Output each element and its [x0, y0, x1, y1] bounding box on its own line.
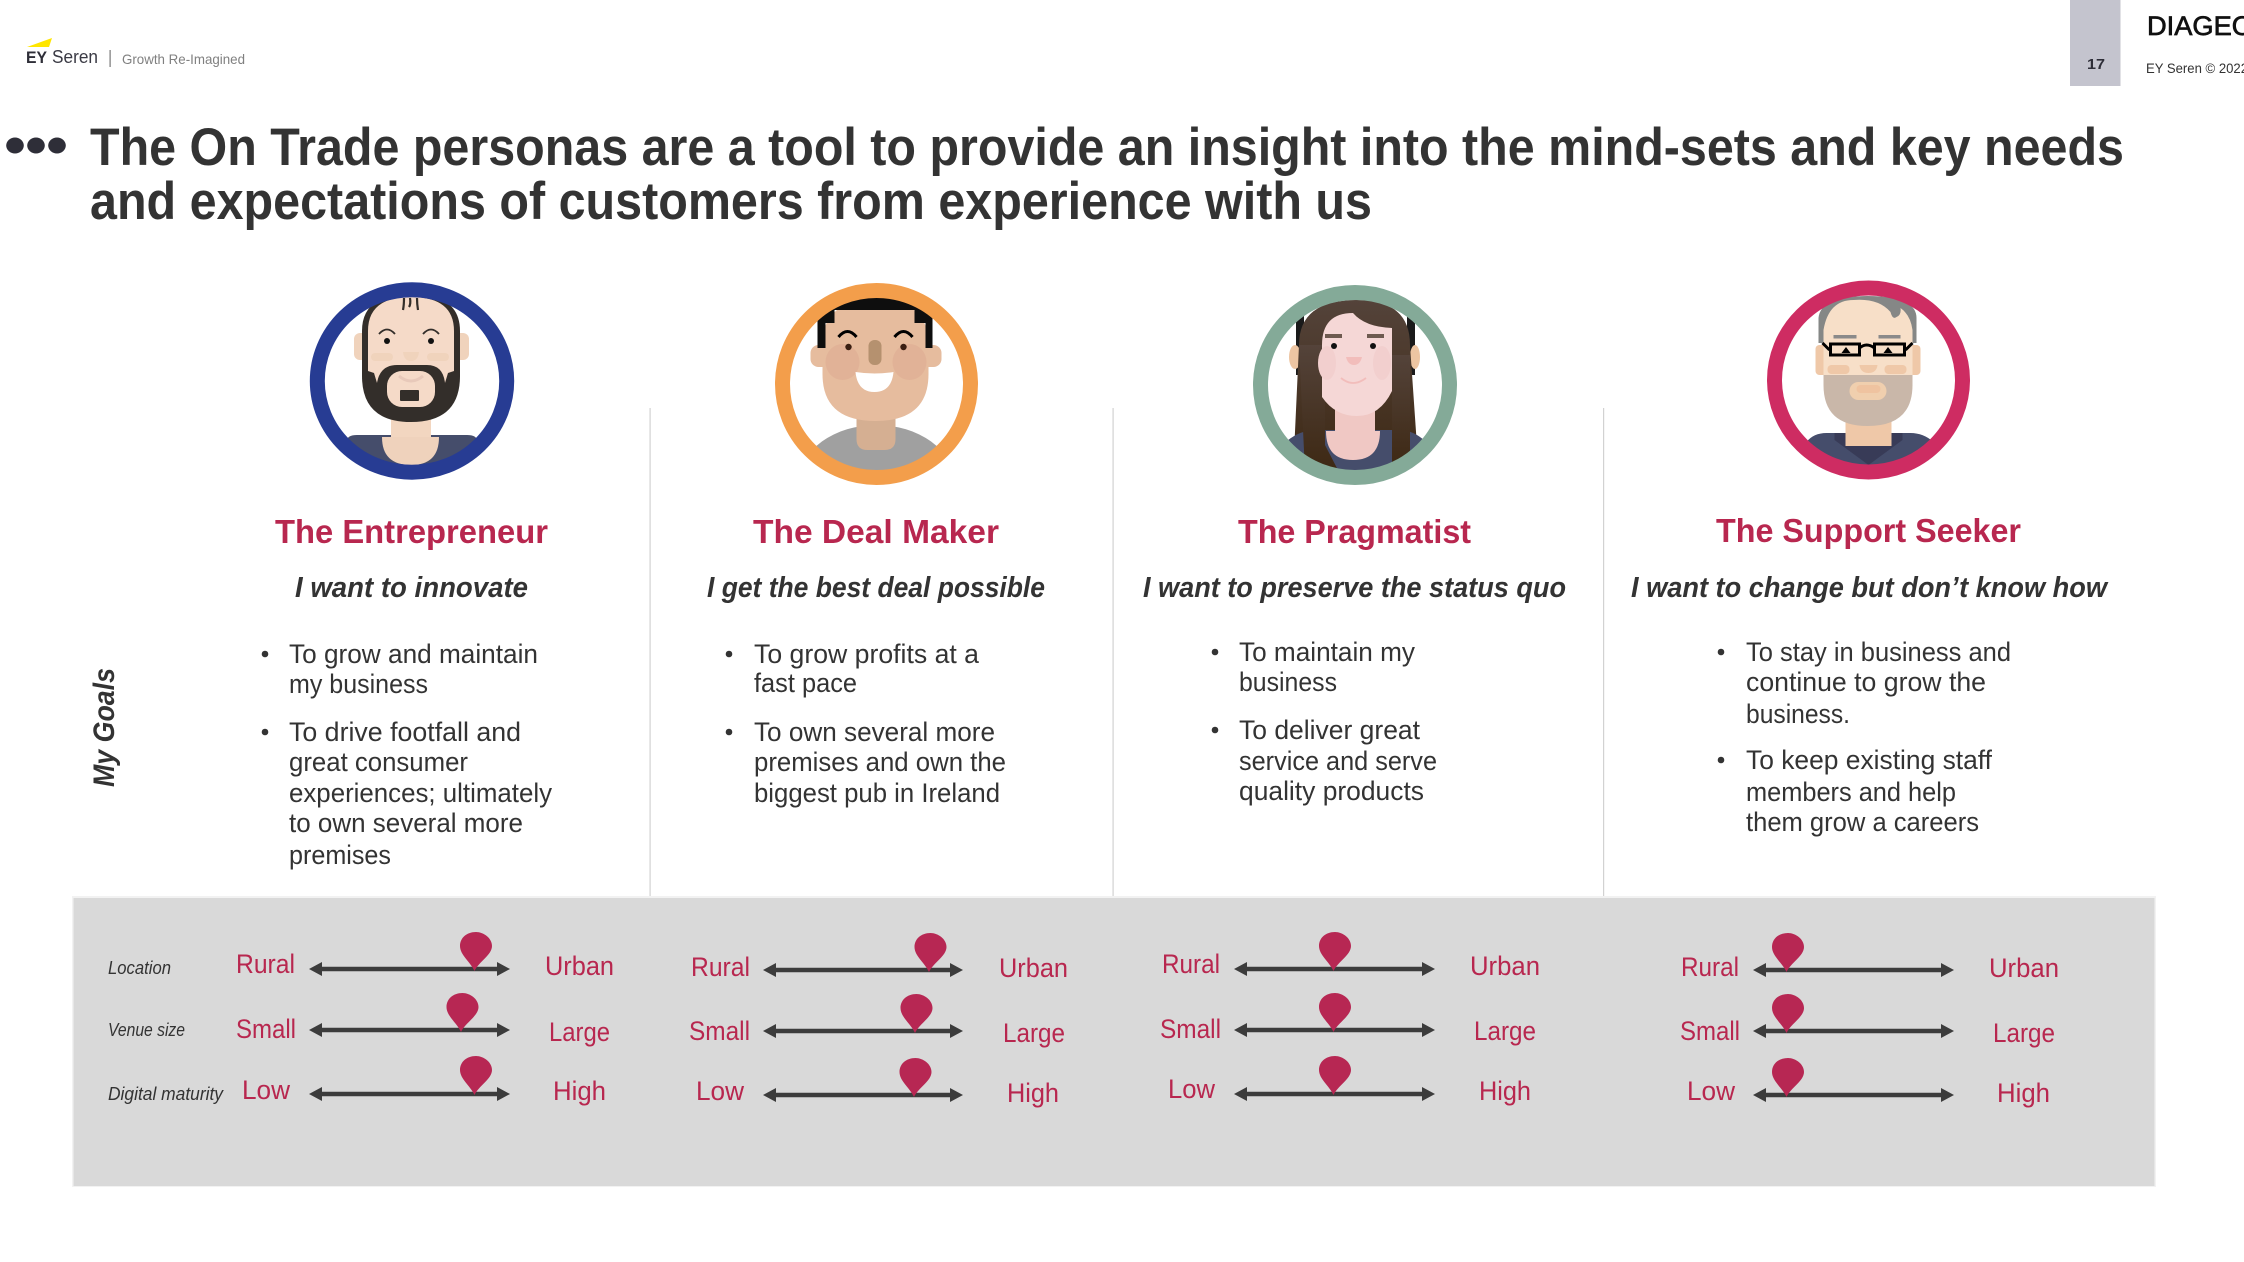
quote: Deal Maker: I get the best deal possible — [707, 572, 1045, 604]
icon: Support Seeker avatar — [1774, 288, 1964, 480]
quote: Pragmatist: I want to preserve the status quo — [1143, 572, 1566, 604]
goals list: Entrepreneur: my business — [289, 669, 428, 699]
icon: Pragmatist avatar — [1260, 292, 1450, 485]
goals list: Deal Maker: To grow profits at a — [754, 639, 979, 669]
scales: Entrepreneur: Rural — [236, 949, 295, 979]
scales: Pragmatist: High — [1479, 1076, 1531, 1106]
scales: Deal Maker — [689, 933, 1068, 1108]
scales: Entrepreneur — [236, 932, 614, 1106]
goals list: Pragmatist: To deliver great — [1239, 715, 1421, 745]
logo: EY Seren Growth Re-Imagined: Seren — [52, 47, 98, 67]
goals list: Support Seeker: continue to grow the — [1746, 667, 1986, 697]
scales: Pragmatist: Large — [1474, 1016, 1536, 1046]
scales: Pragmatist: Low — [1168, 1074, 1215, 1104]
column divider — [1112, 408, 1114, 897]
goals list: Deal Maker — [726, 639, 1006, 808]
goals list: Deal Maker: biggest pub in Ireland — [754, 778, 1000, 808]
scales: Deal Maker: High — [1007, 1078, 1059, 1108]
scales: Entrepreneur: High — [553, 1076, 606, 1106]
goals list: Support Seeker — [1718, 637, 2011, 837]
heading: The Pragmatist: The Pragmatist — [1238, 513, 1471, 550]
scales: Entrepreneur: Small — [236, 1014, 296, 1044]
row labels: Location — [108, 958, 171, 978]
goals list: Entrepreneur — [262, 639, 553, 870]
page number tab: 17 — [2087, 56, 2105, 73]
goals list: Entrepreneur: To drive footfall and — [289, 717, 521, 747]
goals list: Pragmatist — [1212, 637, 1437, 806]
row labels: Digital maturity — [108, 1084, 224, 1104]
icon: Deal Maker avatar — [775, 283, 978, 485]
scales: Entrepreneur: Urban — [545, 951, 614, 981]
scales: Deal Maker: Small — [689, 1016, 750, 1046]
goals list: Pragmatist: business — [1239, 667, 1337, 697]
goals list: Deal Maker: fast pace — [754, 668, 857, 698]
quote: Entrepreneur: I want to innovate — [295, 572, 528, 604]
scales: Support Seeker: Small — [1680, 1016, 1740, 1046]
panel: persona scales — [72, 896, 2156, 1187]
logo: EY Seren Growth Re-Imagined — [26, 38, 245, 67]
goals list: Deal Maker: To own several more — [754, 717, 995, 747]
goals list: Support Seeker: To stay in business and — [1746, 637, 2011, 667]
page number tab — [2070, 0, 2120, 86]
heading: The Deal Maker: The Deal Maker — [753, 513, 999, 550]
goals list: Pragmatist: To maintain my — [1239, 637, 1416, 667]
goals list: Pragmatist: quality products — [1239, 776, 1424, 806]
scales: Deal Maker: Low — [696, 1076, 744, 1106]
scales: Pragmatist: Rural — [1162, 949, 1220, 979]
goals list: Support Seeker: members and help — [1746, 777, 1956, 807]
logo: EY Seren Growth Re-Imagined: EY — [26, 48, 48, 67]
logo: EY Seren Growth Re-Imagined: Growth Re-Imagined — [122, 51, 245, 67]
scales: Entrepreneur: Large — [549, 1017, 610, 1047]
icon: Entrepreneur avatar — [317, 290, 507, 481]
scales: Support Seeker: Rural — [1681, 952, 1739, 982]
goals list: Support Seeker: To keep existing staff — [1746, 745, 1993, 775]
goals list: Entrepreneur: To grow and maintain — [289, 639, 538, 669]
scales: Deal Maker: Rural — [691, 952, 750, 982]
scales: Entrepreneur: Low — [242, 1075, 290, 1105]
scales: Pragmatist — [1160, 932, 1540, 1106]
goals list: Entrepreneur: premises — [289, 840, 391, 870]
goals list: Deal Maker: premises and own the — [754, 747, 1006, 777]
scales: Deal Maker: Urban — [999, 953, 1068, 983]
heading: The Support Seeker: The Support Seeker — [1716, 512, 2021, 549]
row labels: Venue size — [108, 1020, 185, 1040]
scales: Pragmatist: Small — [1160, 1014, 1221, 1044]
column divider — [650, 408, 651, 897]
title — [90, 118, 2124, 231]
column divider — [1603, 408, 1604, 897]
scales: Support Seeker: Urban — [1989, 953, 2059, 983]
goals list: Support Seeker: business. — [1746, 699, 1850, 729]
heading: The Entrepreneur: The Entrepreneur — [275, 513, 548, 550]
scales: Support Seeker: Large — [1993, 1018, 2055, 1048]
goals list: Support Seeker: them grow a careers — [1746, 807, 1979, 837]
scales: Support Seeker — [1680, 933, 2059, 1108]
scales: Support Seeker: Low — [1687, 1076, 1735, 1106]
scales: Support Seeker: High — [1997, 1078, 2050, 1108]
label: My Goals: My Goals — [88, 668, 121, 787]
client name and copyright — [2146, 11, 2244, 76]
icon: title dots — [6, 138, 66, 154]
goals list: Entrepreneur: experiences; ultimately — [289, 778, 553, 808]
scales: Deal Maker: Large — [1003, 1018, 1065, 1048]
row labels — [108, 958, 224, 1104]
scales: Pragmatist: Urban — [1470, 951, 1540, 981]
goals list: Entrepreneur: great consumer — [289, 747, 468, 777]
quote: Support Seeker: I want to change but don’t know how — [1631, 572, 2109, 604]
goals list: Entrepreneur: to own several more — [289, 808, 523, 838]
goals list: Pragmatist: service and serve — [1239, 746, 1437, 776]
title: and expectations of customers from experience with us — [90, 172, 1372, 231]
